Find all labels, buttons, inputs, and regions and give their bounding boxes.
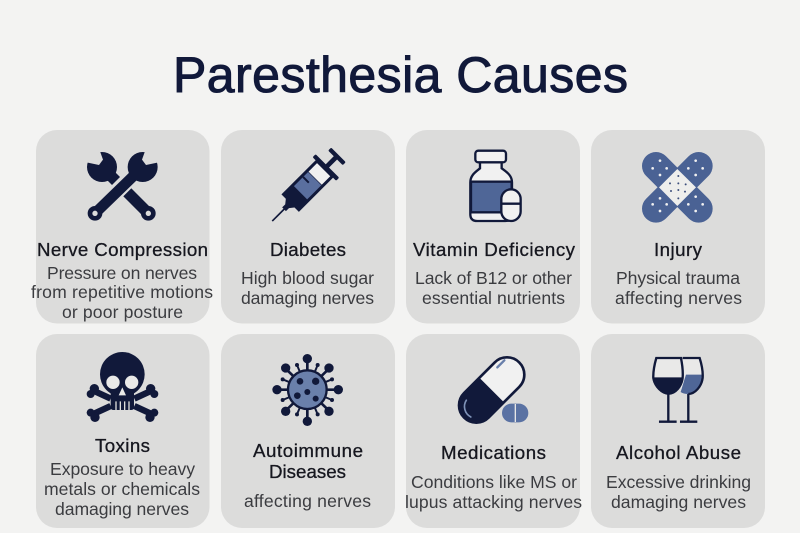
description: High blood sugar bbox=[241, 268, 374, 288]
heading: Toxins bbox=[95, 435, 150, 456]
panel: Injury bbox=[591, 130, 765, 324]
description: Conditions like MS or bbox=[411, 472, 577, 492]
description: essential nutrients bbox=[422, 288, 565, 308]
card background bbox=[221, 130, 395, 324]
description: metals or chemicals bbox=[44, 479, 200, 499]
icon: crossed bandages bbox=[651, 159, 704, 212]
panel: Diabetes bbox=[221, 130, 395, 324]
icon: supplement bottle and capsule bbox=[470, 151, 521, 221]
description: lupus attacking nerves bbox=[405, 492, 582, 512]
card background bbox=[221, 334, 395, 528]
title: Paresthesia Causes bbox=[173, 47, 628, 103]
description bbox=[241, 268, 374, 308]
panel: Vitamin Deficiency bbox=[406, 130, 580, 324]
card background bbox=[36, 334, 210, 528]
description: Pressure on nerves bbox=[47, 263, 197, 283]
card background bbox=[406, 130, 580, 324]
heading: Diseases bbox=[269, 461, 346, 482]
panel: Nerve Compression bbox=[31, 130, 213, 324]
panel: Medications bbox=[405, 334, 582, 528]
description: damaging nerves bbox=[55, 499, 189, 519]
description: from repetitive motions bbox=[31, 282, 213, 302]
description: affecting nerves bbox=[615, 288, 742, 308]
description bbox=[31, 263, 213, 322]
panel: Toxins bbox=[36, 334, 210, 528]
card background bbox=[406, 334, 580, 528]
heading: Autoimmune bbox=[253, 440, 363, 461]
icon: virus bbox=[272, 354, 343, 426]
heading bbox=[253, 440, 363, 482]
card background bbox=[591, 130, 765, 324]
heading: Medications bbox=[441, 442, 546, 463]
panel: Alcohol Abuse bbox=[591, 334, 765, 528]
icon: wine glasses bbox=[653, 358, 703, 422]
heading: Diabetes bbox=[270, 239, 346, 260]
description bbox=[415, 268, 572, 308]
description: damaging nerves bbox=[611, 492, 746, 512]
description: Excessive drinking bbox=[606, 472, 751, 492]
icon: capsule and pill bbox=[452, 350, 531, 430]
card background bbox=[36, 130, 210, 324]
heading: Vitamin Deficiency bbox=[413, 239, 576, 260]
heading: Nerve Compression bbox=[37, 239, 208, 260]
description: Physical trauma bbox=[616, 268, 740, 288]
description bbox=[615, 268, 742, 308]
icon: crossed wrenches bbox=[80, 147, 165, 222]
description: Lack of B12 or other bbox=[415, 268, 572, 288]
description bbox=[606, 472, 751, 512]
card background bbox=[591, 334, 765, 528]
heading: Alcohol Abuse bbox=[616, 442, 741, 463]
description: affecting nerves bbox=[244, 491, 371, 511]
icon: syringe bbox=[260, 143, 350, 233]
heading: Injury bbox=[654, 239, 703, 260]
icon: skull and crossbones bbox=[87, 352, 158, 422]
description: or poor posture bbox=[62, 302, 183, 322]
description bbox=[405, 472, 582, 512]
description: Exposure to heavy bbox=[50, 459, 195, 479]
description bbox=[44, 459, 200, 519]
description: damaging nerves bbox=[241, 288, 374, 308]
panel: Autoimmune Diseases bbox=[221, 334, 395, 528]
